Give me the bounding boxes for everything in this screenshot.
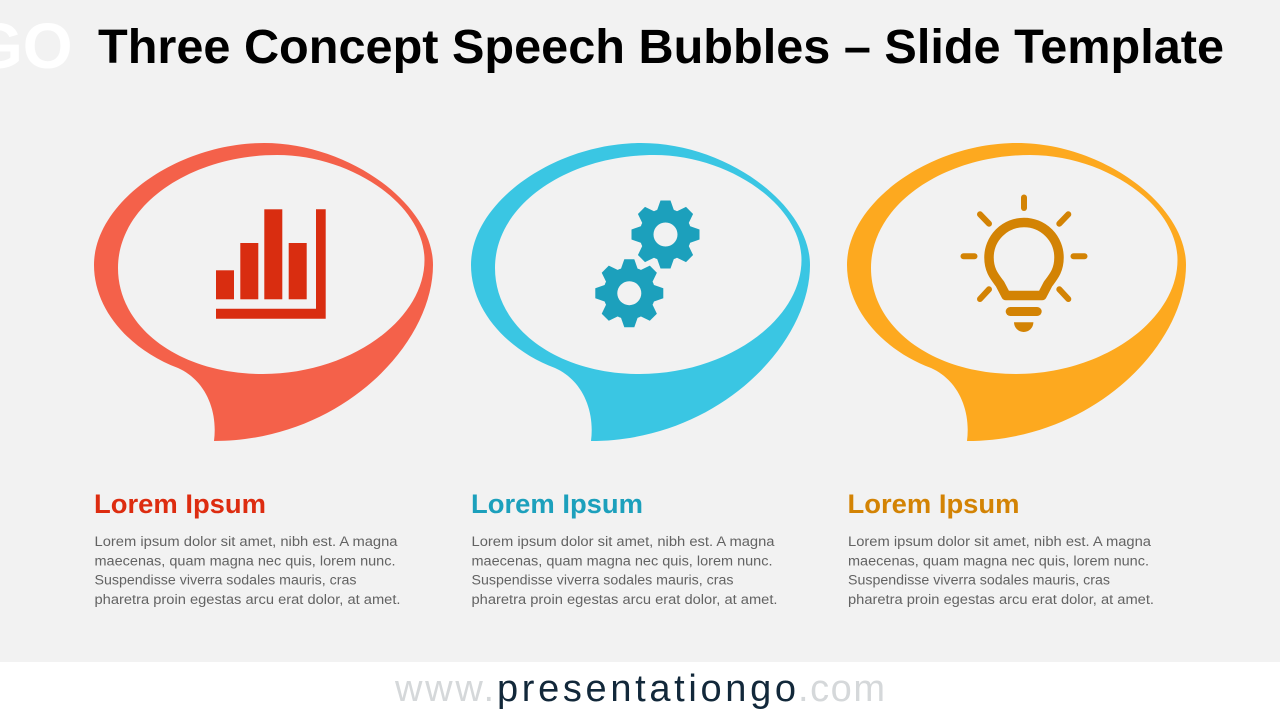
footer band <box>0 662 1280 720</box>
heading: concept three: Lorem Ipsum <box>848 489 1020 519</box>
footer website address <box>394 668 885 710</box>
panel: concept two <box>471 143 810 607</box>
icon: light bulb <box>964 198 1084 332</box>
text block: concept three: Lorem ipsum dolor sit amet, nibh est. A magna <box>848 534 1152 549</box>
text block: concept two: maecenas, quam magna nec quis, lorem nunc. <box>472 554 772 568</box>
speech bubble: blue <box>471 143 810 441</box>
speech bubble: orange <box>847 143 1186 441</box>
text block: concept three <box>848 534 1154 607</box>
panel: concept three <box>847 143 1186 607</box>
icon: bar chart <box>216 209 326 319</box>
title: Three Concept Speech Bubbles – Slide Template <box>98 21 1224 74</box>
text block: concept one <box>94 534 400 607</box>
footer website address: www. <box>394 668 494 710</box>
text block: concept three: maecenas, quam magna nec quis, lorem nunc. <box>848 554 1149 568</box>
text block: concept two: Suspendisse viverra sodales mauris, cras <box>472 572 734 588</box>
text block: concept two: pharetra proin egestas arcu erat dolor, at amet. <box>472 592 778 607</box>
text block: concept one: Suspendisse viverra sodales mauris, cras <box>94 572 357 588</box>
panel: concept one <box>94 143 433 607</box>
heading: concept one: Lorem Ipsum <box>94 489 266 519</box>
text block: concept two: Lorem ipsum dolor sit amet, nibh est. A magna <box>472 534 775 549</box>
text block: concept two <box>472 534 778 607</box>
heading: concept two: Lorem Ipsum <box>471 489 643 519</box>
footer website address: presentationgo <box>497 668 796 710</box>
text block: concept three: pharetra proin egestas arcu erat dolor, at amet. <box>848 592 1154 607</box>
speech bubble: red <box>94 143 433 441</box>
icon: gears <box>595 200 700 327</box>
text block: concept one: Lorem ipsum dolor sit amet, nibh est. A magna <box>94 534 398 549</box>
text block: concept one: maecenas, quam magna nec quis, lorem nunc. <box>94 554 396 568</box>
footer website address: .com <box>798 668 885 710</box>
text block: concept one: pharetra proin egestas arcu erat dolor, at amet. <box>94 592 400 607</box>
text block: concept three: Suspendisse viverra sodales mauris, cras <box>848 572 1110 588</box>
